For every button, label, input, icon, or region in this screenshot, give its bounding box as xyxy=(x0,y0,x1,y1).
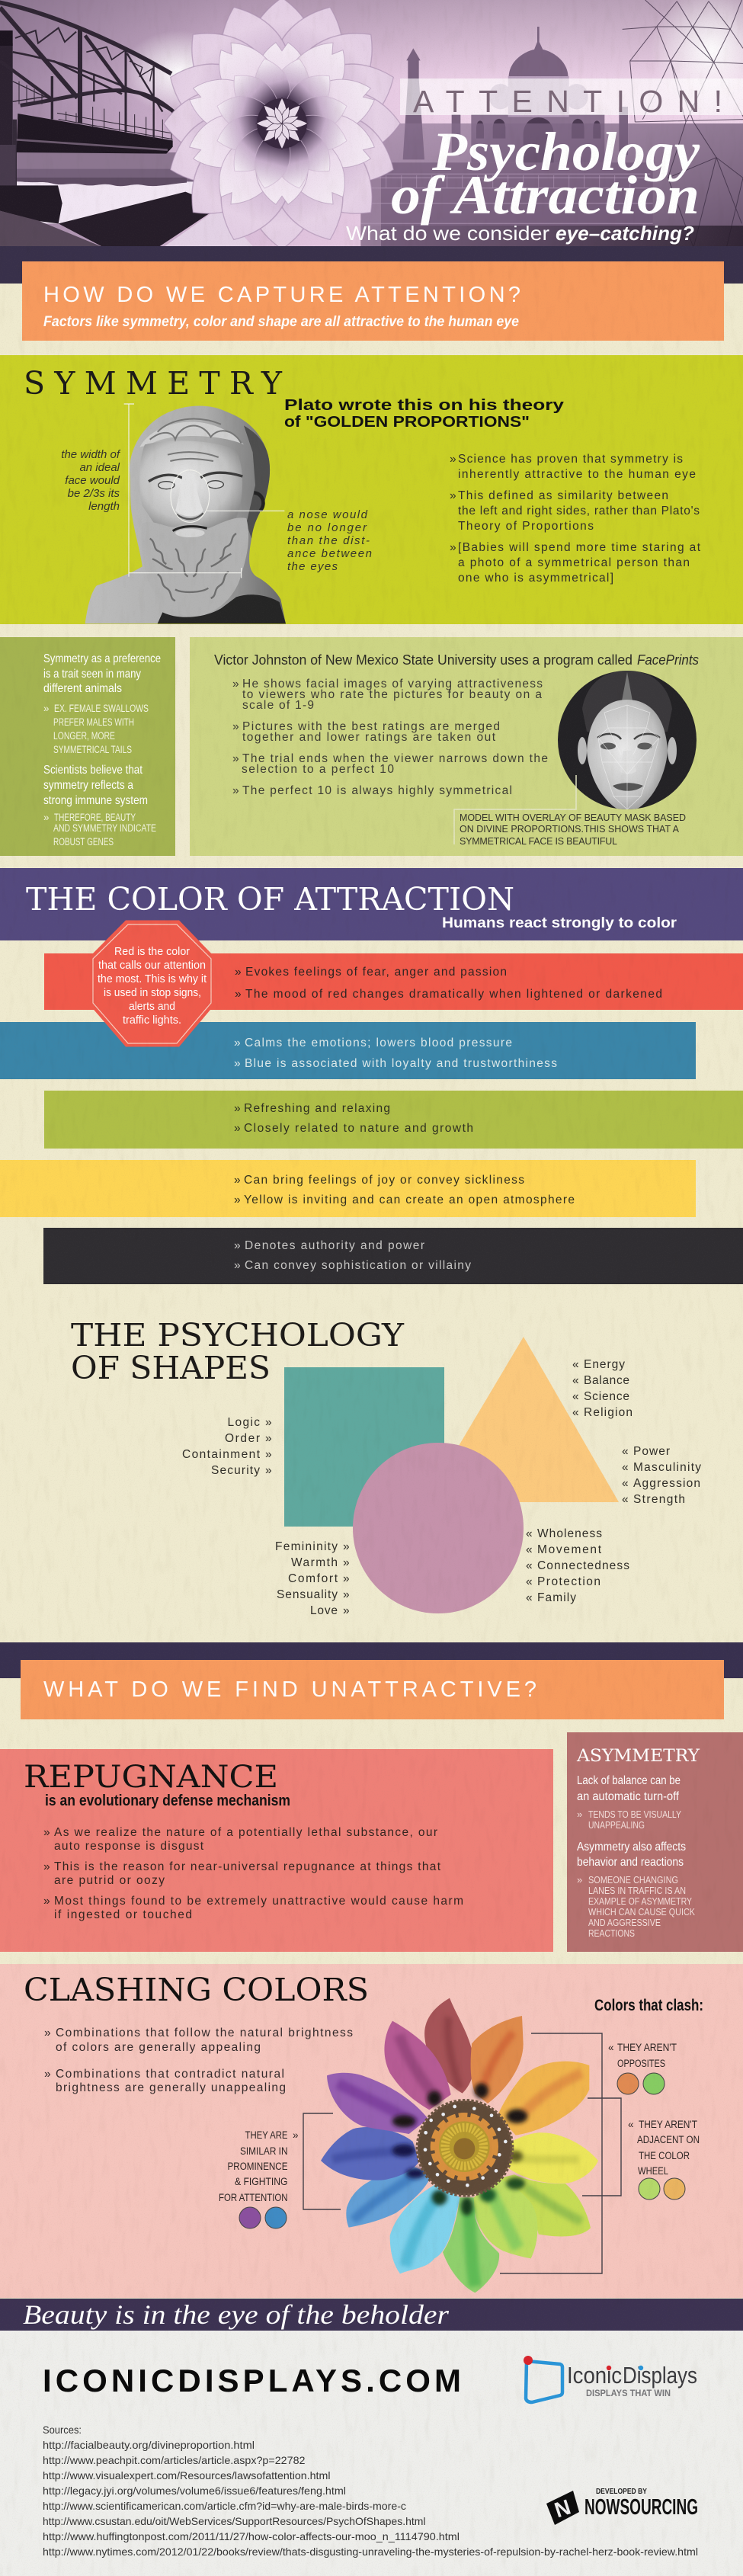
text: genes xyxy=(43,812,156,847)
panel: what do we find unattractive xyxy=(21,1660,724,1719)
label: not adjacent xyxy=(628,2119,700,2200)
panel: color of attraction header xyxy=(0,868,743,940)
heading: THE COLOR OF ATTRACTION xyxy=(26,881,514,918)
sources: http://www.peachpit.com/articles/article.aspx?p=22782 xyxy=(43,2454,306,2466)
label: not adjacent: ADJACENT ON xyxy=(637,2134,700,2145)
circle labels: femininity: » xyxy=(343,1572,350,1585)
title: of Attraction: of Attraction xyxy=(391,165,700,226)
repugnance bullets: » xyxy=(43,1860,50,1873)
text: immune system: symmetry reflects a xyxy=(43,779,133,792)
golden proportions heading xyxy=(284,397,565,431)
square labels: Order xyxy=(225,1432,260,1445)
clashing bullets: of colors are generally appealing xyxy=(56,2041,261,2054)
callout: red stop sign: Red is the color xyxy=(114,945,190,958)
symmetry bullets xyxy=(450,453,701,585)
repugnance bullets: » xyxy=(43,1895,50,1908)
logo: NowSourcing: DEVELOPED BY xyxy=(596,2487,647,2496)
logo: Iconic Displays xyxy=(524,2356,697,2402)
annotation: face width: be 2/3s its xyxy=(68,487,120,500)
geodesic dome lines xyxy=(623,0,743,248)
label: not adjacent: THE COLOR xyxy=(639,2150,690,2161)
triangle labels: energy: Energy xyxy=(584,1358,625,1371)
annotation: face width: the width of xyxy=(61,448,121,461)
heading: HOW DO WE CAPTURE ATTENTION? xyxy=(43,283,520,307)
sources: http://www.huffingtonpost.com/2011/11/27/how-color-affects-our-moo_n_1114790.html xyxy=(43,2530,460,2542)
label: similar prominence xyxy=(219,2129,299,2228)
sources xyxy=(43,2424,698,2558)
heading: CLASHING COLORS xyxy=(24,1972,369,2008)
repugnance bullets: if ingested or touched xyxy=(54,1908,192,1921)
square labels xyxy=(182,1416,272,1477)
FacePrints bullets: The perfect 10 is always highly symmetrical xyxy=(242,784,512,797)
triangle labels: power: « xyxy=(622,1493,629,1506)
bar: red: Evokes feelings of fear, anger and passion xyxy=(245,966,507,979)
triangle labels: energy: « xyxy=(572,1358,579,1371)
logo: Iconic Displays: DISPLAYS THAT WIN xyxy=(586,2388,671,2398)
bar: blue: » xyxy=(234,1057,241,1070)
text: traffic example: SOMEONE CHANGING xyxy=(588,1874,678,1886)
triangle labels: energy: Balance xyxy=(584,1374,629,1387)
symmetry bullets: Science has proven that symmetry is xyxy=(458,453,683,466)
repugnance bullets: auto response is disgust xyxy=(54,1840,204,1853)
text: genes: THEREFORE, BEAUTY xyxy=(54,812,136,823)
text: immune system: Scientists believe that xyxy=(43,764,143,777)
illustration: face with beauty mask xyxy=(558,671,697,812)
callout: red stop sign: that calls our attention xyxy=(98,959,206,972)
circle labels: wholeness: « xyxy=(526,1575,533,1588)
logo: NowSourcing: N xyxy=(552,2495,574,2522)
bar: black xyxy=(43,1228,743,1284)
panel: FacePrints xyxy=(190,637,743,856)
bar: green: » xyxy=(234,1122,241,1135)
dark overlay lower right xyxy=(381,123,743,246)
subheading: Factors like symmetry, color and shape are all attractive to the human eye xyxy=(43,314,519,330)
sources: http://legacy.jyi.org/volumes/volume6/issue6/features/feng.html xyxy=(43,2485,346,2497)
triangle labels: power: Aggression xyxy=(633,1477,700,1490)
FacePrints bullets: » xyxy=(232,720,239,733)
clashing bullets xyxy=(44,2027,353,2094)
white title band xyxy=(400,78,743,115)
panel: repugnance xyxy=(0,1749,553,1952)
bar: green: Refreshing and relaxing xyxy=(244,1102,390,1115)
annotation: face width: face would xyxy=(65,474,120,487)
text: immune system: strong immune system xyxy=(43,794,148,807)
text: preference: is a trait seen in many xyxy=(43,668,141,681)
triangle labels: power: Masculinity xyxy=(633,1461,701,1474)
square labels: » xyxy=(265,1432,272,1445)
panel: symmetry xyxy=(0,355,743,624)
square labels: Logic xyxy=(227,1416,260,1429)
annotation: nose xyxy=(287,508,372,573)
caption: SYMMETRICAL FACE IS BEAUTIFUL xyxy=(460,836,617,847)
dark band: unattractive xyxy=(0,1642,743,1678)
triangle labels: energy xyxy=(572,1358,633,1419)
label: they aren't opposites xyxy=(608,2042,677,2094)
circle labels: wholeness: « xyxy=(526,1527,533,1540)
subheading: Humans react strongly to color xyxy=(442,915,677,931)
circle labels: femininity: » xyxy=(343,1588,350,1601)
label: they aren't opposites: « xyxy=(608,2042,614,2053)
repugnance bullets: are putrid or oozy xyxy=(54,1874,165,1887)
text: preference: different animals xyxy=(43,682,122,695)
bar: red: » xyxy=(235,988,242,1001)
triangle labels: power: « xyxy=(622,1461,629,1474)
square labels: Security xyxy=(211,1464,260,1477)
heading: colors that clash: Colors that clash: xyxy=(594,1997,703,2014)
hero banner xyxy=(0,0,743,252)
logo: NowSourcing xyxy=(546,2487,698,2525)
text: immune system xyxy=(43,764,148,807)
sources: Sources: xyxy=(43,2424,82,2436)
triangle labels: power: « xyxy=(622,1477,629,1490)
illustration: steel bridge and river xyxy=(0,2,254,248)
label: not adjacent: WHEEL xyxy=(638,2165,668,2177)
repugnance bullets: As we realize the nature of a potentially lethal substance, our xyxy=(54,1826,437,1839)
measuring lines xyxy=(124,404,284,578)
text: preference xyxy=(43,652,161,695)
clashing bullets: » xyxy=(44,2068,51,2081)
subtitle xyxy=(346,222,694,245)
text: genes: » xyxy=(43,812,50,823)
text: lack of balance: an automatic turn-off xyxy=(577,1790,680,1803)
label: they aren't opposites: OPPOSITES xyxy=(617,2058,665,2069)
dark band under hero xyxy=(0,246,743,284)
circle labels: femininity: Femininity xyxy=(275,1540,338,1553)
square xyxy=(284,1367,444,1527)
repugnance bullets xyxy=(43,1826,463,1921)
text: swallows: » xyxy=(43,703,50,714)
symmetry bullets: [Babies will spend more time staring at xyxy=(458,541,701,554)
text: behavior: behavior and reactions xyxy=(577,1856,684,1869)
subheading: is an evolutionary defense mechanism xyxy=(45,1793,290,1809)
symmetry bullets: a photo of a symmetrical person than xyxy=(458,556,690,569)
label: similar prominence: PROMINENCE xyxy=(227,2161,288,2172)
circle labels: femininity: » xyxy=(343,1556,350,1569)
text: traffic example: » xyxy=(577,1874,582,1886)
bar: yellow: » xyxy=(234,1174,241,1187)
triangle labels: power: « xyxy=(622,1445,629,1458)
label: similar prominence: FOR ATTENTION xyxy=(219,2192,288,2203)
annotation: face width xyxy=(61,448,121,513)
circle labels: wholeness xyxy=(526,1527,629,1604)
heading: THE PSYCHOLOGY xyxy=(71,1317,405,1354)
text: traffic example: EXAMPLE OF ASYMMETRY xyxy=(588,1895,692,1907)
text: preference: Symmetry as a preference xyxy=(43,652,161,665)
circle labels: wholeness: Family xyxy=(537,1591,576,1604)
bar: yellow: Yellow is inviting and can create an open atmosphere xyxy=(244,1193,575,1206)
circle labels: femininity: Warmth xyxy=(291,1556,338,1569)
circle labels: wholeness: « xyxy=(526,1591,533,1604)
triangle labels: energy: Religion xyxy=(584,1406,633,1419)
annotation: nose: be no longer xyxy=(287,521,367,534)
FacePrints bullets: » xyxy=(232,784,239,797)
logo: Iconic Displays: Displays xyxy=(623,2362,697,2389)
triangle xyxy=(425,1337,619,1502)
square labels: Containment xyxy=(182,1448,261,1461)
FacePrints bullets: » xyxy=(232,752,239,765)
text: traffic example xyxy=(577,1874,695,1939)
bar: black: Can convey sophistication or villainy xyxy=(245,1259,471,1272)
repugnance bullets: » xyxy=(43,1826,50,1839)
clashing bullets: brightness are generally unappealing xyxy=(56,2081,286,2094)
intro line: Victor Johnston of New Mexico State University uses a program called xyxy=(214,652,633,668)
triangle labels: energy: « xyxy=(572,1406,579,1419)
footer xyxy=(0,2331,743,2576)
label: similar prominence: » xyxy=(293,2129,299,2141)
callout: red stop sign xyxy=(90,921,214,1047)
symmetry bullets: Theory of Proportions xyxy=(458,520,594,533)
repugnance bullets: This is the reason for near-universal repugnance at things that xyxy=(54,1860,441,1873)
caption: ON DIVINE PROPORTIONS.THIS SHOWS THAT A xyxy=(460,824,680,835)
text: swallows: PREFER MALES WITH xyxy=(53,716,134,728)
illustration: symmetric flower xyxy=(158,0,406,252)
callout: red stop sign: is used in stop signs, xyxy=(104,986,201,999)
bar: green: » xyxy=(234,1102,241,1115)
title: Psychology: Psychology xyxy=(431,121,700,182)
bar: red: » xyxy=(235,966,242,979)
annotation: nose: the eyes xyxy=(287,560,338,573)
subtitle: eye–catching? xyxy=(556,222,694,245)
sources: http://www.csustan.edu/oit/WebServices/SupportResources/PsychOfShapes.html xyxy=(43,2515,425,2527)
annotation: nose: a nose would xyxy=(287,508,368,521)
bar: yellow: » xyxy=(234,1193,241,1206)
square labels: » xyxy=(265,1448,272,1461)
bar: green xyxy=(44,1091,743,1149)
text: visually unappealing: » xyxy=(577,1809,582,1820)
intro line: FacePrints xyxy=(637,652,699,668)
section: psychology of shapes xyxy=(71,1317,701,1617)
caption: MODEL WITH OVERLAY OF BEAUTY MASK BASED xyxy=(460,812,686,823)
illustration: rainbow flower xyxy=(321,1998,598,2292)
symmetry bullets: the left and right sides, rather than Plato's xyxy=(458,505,700,517)
repugnance bullets: Most things found to be extremely unattractive would cause harm xyxy=(54,1895,463,1908)
circle labels: femininity: » xyxy=(343,1604,350,1617)
circle labels: wholeness: « xyxy=(526,1543,533,1556)
circle labels: femininity: » xyxy=(343,1540,350,1553)
text: swallows xyxy=(43,703,149,755)
banner: beauty is in the eye of the beholder: Beauty is in the eye of the beholder xyxy=(23,2299,450,2330)
callout: red stop sign: the most. This is why it xyxy=(98,972,207,985)
label: similar prominence: & FIGHTING xyxy=(235,2176,288,2187)
FacePrints bullets: The trial ends when the viewer narrows down the xyxy=(242,752,548,765)
subtitle: What do we consider xyxy=(346,222,549,245)
text: visually unappealing: TENDS TO BE VISUALLY xyxy=(588,1809,681,1820)
illustration: Taj Mahal xyxy=(403,27,628,162)
FacePrints bullets: scale of 1-9 xyxy=(242,699,314,712)
triangle labels: energy: « xyxy=(572,1390,579,1403)
triangle labels: energy: Science xyxy=(584,1390,629,1403)
sources: http://www.scientificamerican.com/article.cfm?id=why-are-male-birds-more-c xyxy=(43,2500,406,2512)
square labels: » xyxy=(265,1416,272,1429)
text: visually unappealing: UNAPPEALING xyxy=(588,1819,645,1831)
triangle labels: power: Strength xyxy=(633,1493,685,1506)
symmetry bullets: » xyxy=(450,541,456,554)
symmetry bullets: inherently attractive to the human eye xyxy=(458,468,696,481)
bar: blue xyxy=(0,1022,696,1079)
circle labels: femininity xyxy=(275,1540,350,1617)
circle labels: wholeness: Movement xyxy=(537,1543,602,1556)
circle labels: wholeness: « xyxy=(526,1559,533,1572)
bar: black: » xyxy=(234,1239,241,1252)
platform of monument xyxy=(360,162,653,248)
panel: symmetry in animals xyxy=(0,637,175,856)
text: genes: AND SYMMETRY INDICATE xyxy=(53,822,156,834)
circle labels: wholeness: Protection xyxy=(537,1575,600,1588)
label: they aren't opposites: THEY AREN'T xyxy=(617,2042,677,2053)
text: swallows: EX. FEMALE SWALLOWS xyxy=(54,703,149,714)
label: similar prominence: SIMILAR IN xyxy=(240,2145,288,2157)
label: similar prominence: THEY ARE xyxy=(245,2129,288,2141)
panel: how do we capture attention xyxy=(22,261,724,341)
bar: blue: » xyxy=(234,1036,241,1049)
caption xyxy=(460,812,686,847)
bar: yellow xyxy=(0,1160,696,1217)
annotation: face width: length xyxy=(88,500,120,513)
bar: black: » xyxy=(234,1259,241,1272)
FacePrints bullets: Pictures with the best ratings are merged xyxy=(242,720,500,733)
triangle labels: energy: « xyxy=(572,1374,579,1387)
FacePrints bullets: He shows facial images of varying attractiveness xyxy=(242,678,543,690)
text: traffic example: REACTIONS xyxy=(588,1927,635,1939)
logo: Iconic Displays: Iconic xyxy=(567,2362,622,2389)
FacePrints bullets xyxy=(232,678,548,797)
caption connector xyxy=(454,775,576,844)
symmetry bullets: This defined as similarity between xyxy=(458,489,668,502)
circle labels: femininity: Comfort xyxy=(288,1572,338,1585)
text: visually unappealing xyxy=(577,1809,681,1831)
symmetry bullets: one who is asymmetrical] xyxy=(458,572,613,585)
circle labels: femininity: Love xyxy=(310,1604,338,1617)
heading: WHAT DO WE FIND UNATTRACTIVE? xyxy=(43,1677,536,1702)
sources: http://www.nytimes.com/2012/01/22/books/review/thats-disgusting-unraveling-the-mysteries-of-repulsion-by-rachel-herz-book-review.html xyxy=(43,2546,698,2558)
heading: REPUGNANCE xyxy=(24,1760,278,1795)
illustration: bust of Plato xyxy=(85,404,286,623)
sources: http://facialbeauty.org/divineproportion.html xyxy=(43,2439,255,2451)
bar: blue: Blue is associated with loyalty and trustworthiness xyxy=(245,1057,557,1070)
text: traffic example: WHICH CAN CAUSE QUICK xyxy=(588,1906,695,1918)
annotation: nose: ance between xyxy=(287,547,372,560)
text: lack of balance xyxy=(577,1774,681,1803)
text: behavior xyxy=(577,1841,686,1869)
bar: yellow: Can bring feelings of joy or convey sickliness xyxy=(244,1174,524,1187)
square labels: » xyxy=(265,1464,272,1477)
text: traffic example: LANES IN TRAFFIC IS AN xyxy=(588,1885,686,1896)
clashing bullets: Combinations that follow the natural brightness xyxy=(56,2027,353,2039)
bar: green: Closely related to nature and growth xyxy=(244,1122,473,1135)
text: genes: ROBUST GENES xyxy=(53,836,114,847)
label: not adjacent: THEY AREN'T xyxy=(639,2119,697,2130)
FacePrints bullets: to viewers who rate the pictures for beauty on a xyxy=(242,688,542,701)
sources: http://www.visualexpert.com/Resources/lawsofattention.html xyxy=(43,2469,331,2481)
clashing bullets: Combinations that contradict natural xyxy=(56,2068,284,2081)
text: traffic example: AND AGGRESSIVE xyxy=(588,1917,661,1928)
annotation: nose: than the dist- xyxy=(287,534,370,547)
heading: symmetry: SYMMETRY xyxy=(24,365,283,402)
circle labels: wholeness: Wholeness xyxy=(537,1527,602,1540)
title: ATTENTION!: ATTENTION! xyxy=(413,84,722,119)
circle labels: femininity: Sensuality xyxy=(277,1588,338,1601)
banner: beauty is in the eye of the beholder xyxy=(0,2299,743,2331)
panel: asymmetry xyxy=(567,1732,743,1952)
circle labels: wholeness: Connectedness xyxy=(537,1559,629,1572)
label: not adjacent: « xyxy=(628,2119,634,2130)
text: lack of balance: Lack of balance can be xyxy=(577,1774,681,1787)
symmetry bullets: » xyxy=(450,489,456,502)
clashing bullets: » xyxy=(44,2027,51,2039)
text: swallows: LONGER, MORE xyxy=(53,730,115,742)
bar: red xyxy=(44,953,743,1010)
triangle labels: power xyxy=(622,1445,701,1506)
golden proportions heading: Plato wrote this on his theory xyxy=(284,397,565,414)
brackets xyxy=(303,2033,621,2273)
panel: clashing colors xyxy=(0,1964,743,2298)
bar: black: Denotes authority and power xyxy=(245,1239,424,1252)
heading: OF SHAPES xyxy=(71,1350,271,1386)
bar: blue: Calms the emotions; lowers blood pressure xyxy=(245,1036,512,1049)
symmetry bullets: » xyxy=(450,453,456,466)
website: ICONICDISPLAYS.COM xyxy=(43,2363,461,2398)
heading: ASYMMETRY xyxy=(576,1747,700,1766)
bar: red: The mood of red changes dramatically when lightened or darkened xyxy=(245,988,662,1001)
FacePrints bullets: » xyxy=(232,678,239,690)
golden proportions heading: of "GOLDEN PROPORTIONS" xyxy=(284,414,530,431)
circle xyxy=(353,1443,524,1613)
FacePrints bullets: selection to a perfect 10 xyxy=(242,763,394,776)
callout: red stop sign: alerts and xyxy=(129,1000,175,1013)
triangle labels: power: Power xyxy=(633,1445,670,1458)
callout: red stop sign: traffic lights. xyxy=(123,1014,181,1027)
text: swallows: SYMMETRICAL TAILS xyxy=(53,744,132,755)
FacePrints bullets: together and lower ratings are taken out xyxy=(242,731,496,744)
text: behavior: Asymmetry also affects xyxy=(577,1841,686,1854)
heading xyxy=(71,1317,405,1386)
annotation: face width: an ideal xyxy=(79,461,120,474)
